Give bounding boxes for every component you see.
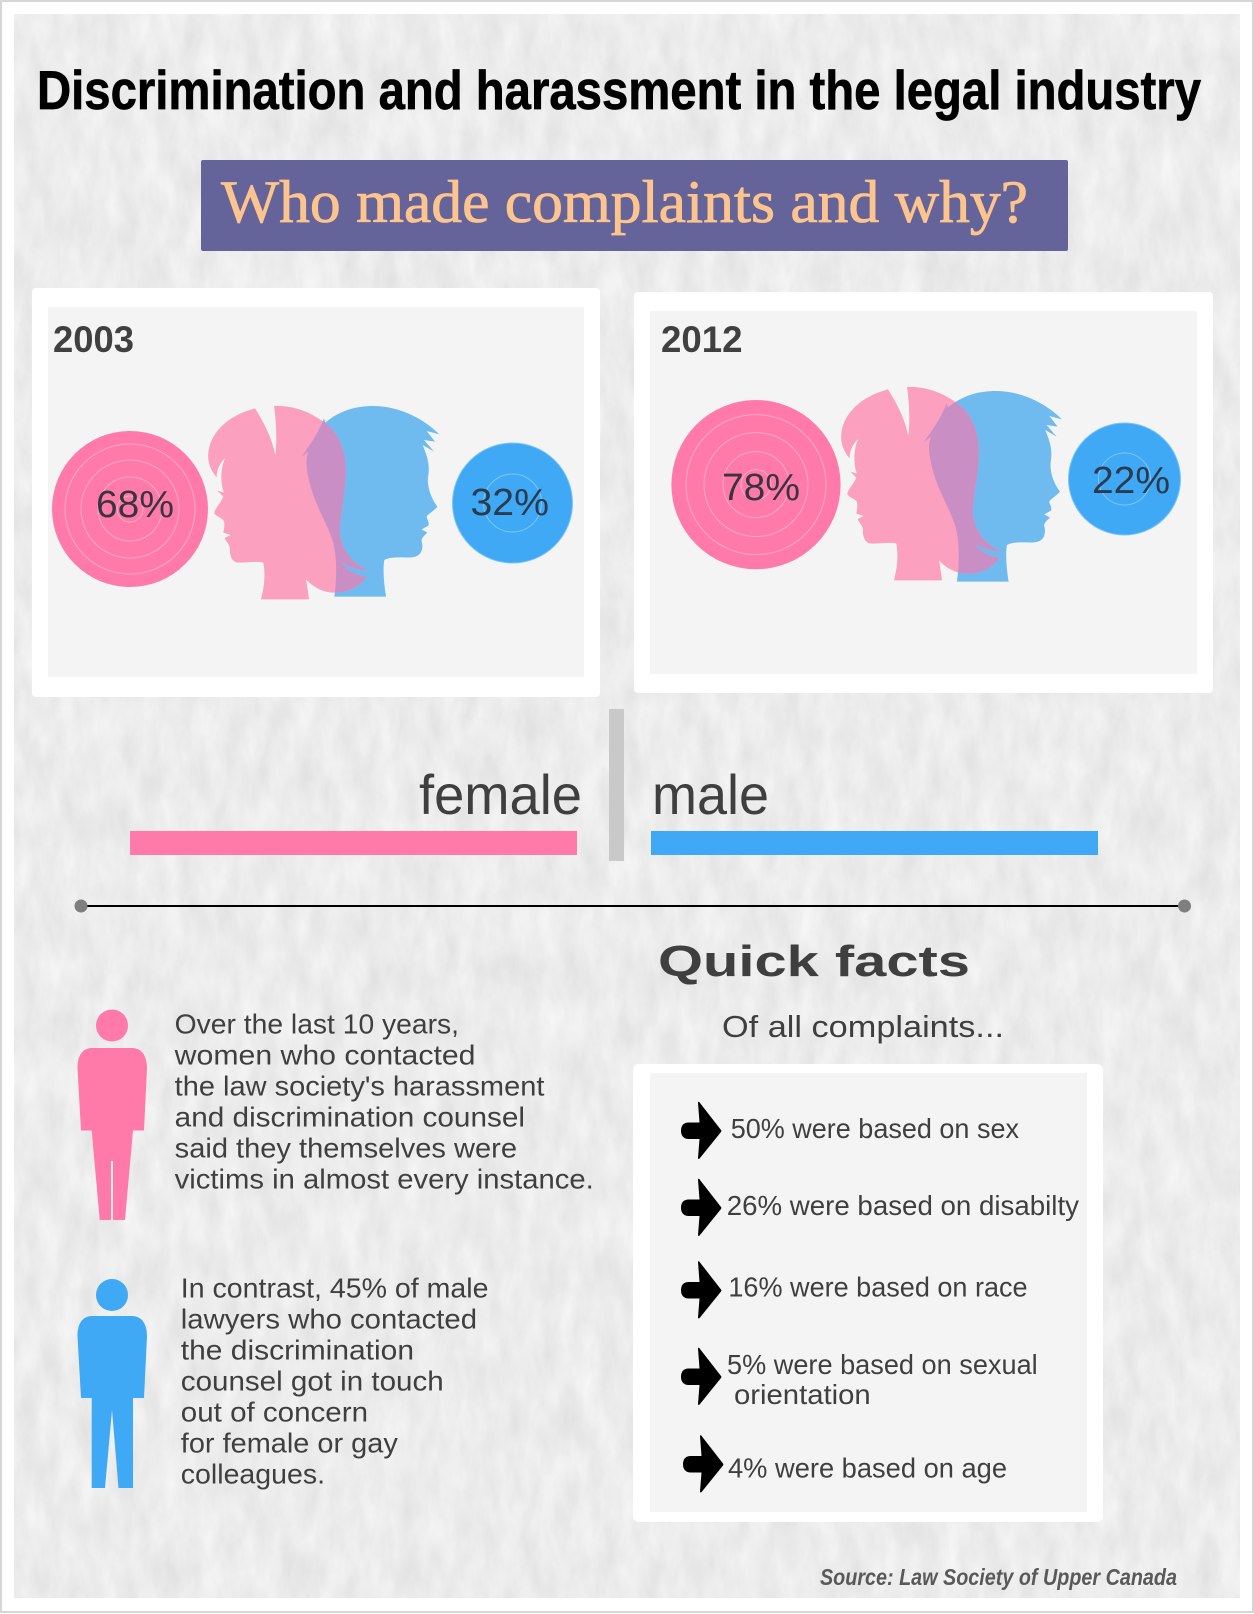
legend bar male (651, 831, 1098, 855)
male percentage circle 32%: 32% (470, 482, 549, 524)
fact 2: 26% were based on disabilty (727, 1190, 1079, 1221)
female percentage circle 68%: 68% (96, 484, 174, 526)
arrow icon 1 (681, 1102, 721, 1159)
icon: male person (78, 1279, 147, 1488)
female percentage circle 78%: 78% (722, 467, 800, 509)
fact 1: 50% were based on sex (731, 1113, 1019, 1144)
subtitle text: Who made complaints and why? (221, 169, 1028, 235)
fact 3: 16% were based on race (728, 1272, 1028, 1303)
fact 4: orientation (734, 1379, 871, 1410)
male percentage circle 22% (1068, 423, 1180, 535)
text block: women: and discrimination counsel (175, 1101, 525, 1132)
panel: 2003 (32, 288, 600, 697)
female percentage circle 68% (52, 431, 208, 587)
text block: women: the law society's harassment (175, 1070, 545, 1101)
legend label female: female (419, 763, 582, 826)
subheading: of all complaints: Of all complaints... (722, 1009, 1004, 1044)
legend (130, 709, 1098, 861)
year label 2003: 2003 (53, 319, 134, 360)
fact 4 (727, 1349, 1038, 1410)
panel: 2012 (634, 292, 1213, 693)
text block: men: colleagues. (181, 1458, 325, 1489)
text block: women (174, 1008, 594, 1194)
text block: women: said they themselves were (175, 1132, 517, 1163)
legend label male: male (652, 763, 769, 826)
arrow icon 3 (681, 1261, 721, 1318)
legend divider (609, 709, 624, 861)
arrow icon 4 (681, 1348, 721, 1405)
panel: complaint reasons (633, 1064, 1103, 1522)
text block: men: for female or gay (181, 1428, 398, 1458)
subtitle banner (201, 160, 1068, 251)
text block: men: out of concern (181, 1396, 368, 1428)
text block: men: the discrimination (181, 1334, 414, 1366)
male percentage circle 22%: 22% (1092, 460, 1170, 502)
icon: female person (78, 1010, 147, 1220)
head silhouettes 2003 (208, 406, 439, 599)
female percentage circle 78% (671, 400, 841, 569)
text block: women: victims in almost every instance. (175, 1163, 594, 1194)
legend bar female (130, 831, 577, 855)
arrow icon 2 (681, 1179, 721, 1236)
text block: women: women who contacted (174, 1040, 475, 1071)
year label 2012: 2012 (661, 319, 742, 360)
text block: women: Over the last 10 years, (175, 1008, 459, 1039)
text block: men: counsel got in touch (181, 1366, 444, 1396)
male percentage circle 32% (452, 443, 572, 563)
heading: quick facts: Quick facts (658, 937, 970, 986)
head silhouettes 2012 (841, 387, 1062, 582)
text block: men: In contrast, 45% of male (181, 1272, 489, 1304)
text block: men: lawyers who contacted (181, 1304, 477, 1334)
fact 4: 5% were based on sexual (727, 1349, 1038, 1380)
source note: Source: Law Society of Upper Canada (820, 1564, 1177, 1590)
fact 5: 4% were based on age (728, 1453, 1007, 1484)
section separator (74, 900, 1191, 912)
arrow icon 5 (683, 1435, 723, 1492)
text block: men (181, 1272, 489, 1489)
